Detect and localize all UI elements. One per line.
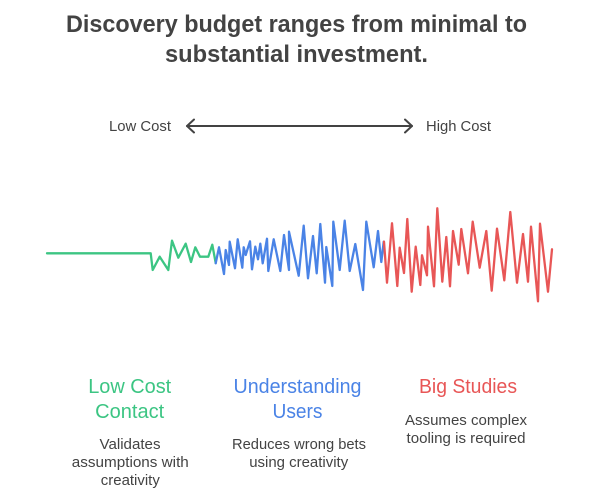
text: low cost contact description: assumptions with bbox=[72, 454, 189, 471]
title: Discovery budget ranges from minimal to bbox=[66, 11, 527, 38]
text: understanding users description: Reduces wrong bets bbox=[232, 436, 366, 453]
label: low cost: Low Cost bbox=[109, 118, 172, 135]
heading: understanding users bbox=[234, 376, 362, 423]
text: low cost contact description: creativity bbox=[101, 472, 160, 489]
text: big studies description: Assumes complex bbox=[405, 412, 527, 429]
heading: low cost contact: Low Cost bbox=[88, 376, 172, 398]
column: big studies bbox=[405, 376, 527, 447]
blue signal segment bbox=[216, 221, 384, 290]
heading: understanding users: Understanding bbox=[234, 376, 362, 398]
signal chart bbox=[47, 208, 552, 301]
cost scale bbox=[109, 118, 492, 135]
green signal segment bbox=[47, 241, 216, 270]
text: low cost contact description bbox=[72, 436, 189, 489]
column: low cost contact bbox=[72, 376, 189, 489]
title: substantial investment. bbox=[165, 41, 428, 68]
heading: low cost contact bbox=[88, 376, 172, 423]
arrow: double-headed cost axis bbox=[187, 120, 412, 132]
heading: low cost contact: Contact bbox=[95, 401, 165, 423]
text: low cost contact description: Validates bbox=[100, 436, 160, 453]
text: understanding users description: using creativity bbox=[249, 454, 349, 471]
column: understanding users bbox=[232, 376, 366, 471]
red signal segment bbox=[384, 208, 552, 301]
text: understanding users description bbox=[232, 436, 366, 471]
heading: big studies: Big Studies bbox=[419, 376, 517, 398]
heading: understanding users: Users bbox=[272, 401, 322, 423]
text: big studies description bbox=[405, 412, 527, 447]
title bbox=[66, 11, 527, 68]
label: high cost: High Cost bbox=[426, 118, 492, 135]
text: big studies description: tooling is required bbox=[406, 430, 526, 447]
